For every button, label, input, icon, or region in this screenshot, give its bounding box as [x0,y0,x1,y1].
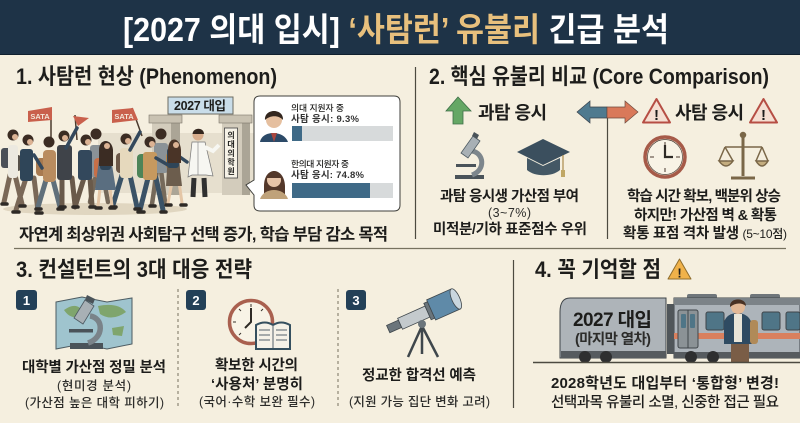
faces [12,134,179,149]
text: strategy 3: (지원 가능 집단 변화 고려) [349,395,490,409]
panel: phenomenon [1,64,400,244]
label: science track: 과탐 응시 [478,103,547,123]
text: social benefits: 확통 표점 격차 발생 (5~10점) [623,225,787,242]
text: strategy 3: 정교한 합격선 예측 [362,367,476,384]
illustration: gate: 의 [227,130,235,140]
icon: clock [645,137,685,177]
icon: scales [719,132,768,178]
text: science benefits: (3~7%) [488,206,531,220]
illustration: gate [98,97,255,195]
icon: map and microscope [56,295,132,349]
stat: oriental medicine applicants [291,158,393,198]
text: strategy 3 [349,367,490,409]
text: science benefits: 과탐 응시생 가산점 부여 [440,188,579,205]
icon: double arrow [577,101,638,123]
icon: clock and book [230,300,290,349]
icon: green up arrow [446,97,471,124]
text: strategy 2: 확보한 시간의 [215,357,298,374]
icon: warning orange: ! [677,266,682,280]
text: strategy 1: (현미경 분석) [57,379,131,393]
icon: telescope [384,287,464,357]
text: strategy 2: ‘사용처’ 분명히 [211,376,303,393]
illustration: flags: SATA [114,112,134,121]
avatar: female student [260,171,288,199]
badge 1: 1 [23,293,30,308]
text: strategy 1: 대학별 가산점 정밀 분석 [22,359,166,376]
text: closing note: 선택과목 유불리 소멸, 신중한 접근 필요 [551,394,779,411]
stat: medical applicants: 의대 지원자 중 [291,102,344,113]
stat: medical applicants: 사탐 응시: 9.3% [291,113,360,125]
badge 1 [16,290,37,310]
label: social track: 사탐 응시 [675,103,744,123]
icon: warning left: ! [654,107,659,124]
text: closing note: 2028학년도 대입부터 ‘통합형’ 변경! [551,375,779,392]
illustration: flags [28,107,142,140]
icon: microscope [455,132,484,179]
text: strategy 1 [22,359,166,410]
badge 2: 2 [192,293,200,308]
heading 4: 4. 꼭 기억할 점 [535,257,661,282]
illustration: gate: 2027 대입 [174,99,226,113]
backpacks [1,148,11,168]
text: social benefits: 학습 시간 확보, 백분위 상승 [627,188,781,205]
icon: warning right: ! [761,107,766,124]
text: social benefits [623,188,787,242]
avatar: male student [260,111,288,142]
illustration: ground shadow [3,203,187,215]
heads [8,130,18,140]
icon: warning left [643,99,670,124]
illustration: gate: 의 [227,148,235,158]
text: social benefits: 하지만! 가산점 벽 & 확통 [634,207,777,224]
illustration: gate: 학 [227,157,235,167]
badge 2 [186,290,206,310]
title: [2027 의대 입시] ‘사탐런’ 유불리 긴급 분석 [123,11,669,48]
badge 3: 3 [352,293,360,308]
text: strategy 2 [199,357,315,409]
text: strategy 2: (국어·수학 보완 필수) [199,394,315,409]
shoes [2,204,186,213]
arms [34,128,187,168]
illustration: student at train [724,299,758,362]
panel: comparison [429,64,787,242]
illustration: gate: 대 [227,139,235,149]
illustration: gate: 원 [227,166,235,176]
illustration: flags: SATA [30,112,50,121]
text: strategy 1: (가산점 높은 대학 피하기) [25,395,164,410]
panel: strategies [16,257,490,410]
header banner [0,0,800,55]
ground line [533,362,800,364]
illustration: student crowd [1,128,187,213]
icon: warning orange [668,259,691,280]
text: closing note [551,375,779,411]
text: science benefits: 미적분/기하 표준점수 우위 [433,221,587,238]
panel: remember [533,257,800,411]
callout: applicant statistics [246,96,400,211]
stat: oriental medicine applicants: 한의대 지원자 중 [291,158,349,169]
heading 3: 3. 컨설턴트의 3대 대응 전략 [16,257,252,282]
heading 1: 1. 사탐런 현상 (Phenomenon) [16,64,277,89]
icon: graduation cap [517,139,570,177]
illustration: train: (마지막 열차) [575,331,651,348]
illustration: doctor [188,129,219,197]
text: science benefits [433,188,587,238]
stat: medical applicants [291,102,393,141]
illustration: train: 2027 대입 [573,309,652,331]
icon: warning right [750,99,777,124]
badge 3 [346,290,366,310]
summary text 1: 자연계 최상위권 사회탐구 선택 증가, 학습 부담 감소 목적 [19,225,388,244]
torsos [8,145,18,178]
illustration: train [560,294,800,363]
stat: oriental medicine applicants: 사탐 응시: 74.8% [291,169,365,181]
